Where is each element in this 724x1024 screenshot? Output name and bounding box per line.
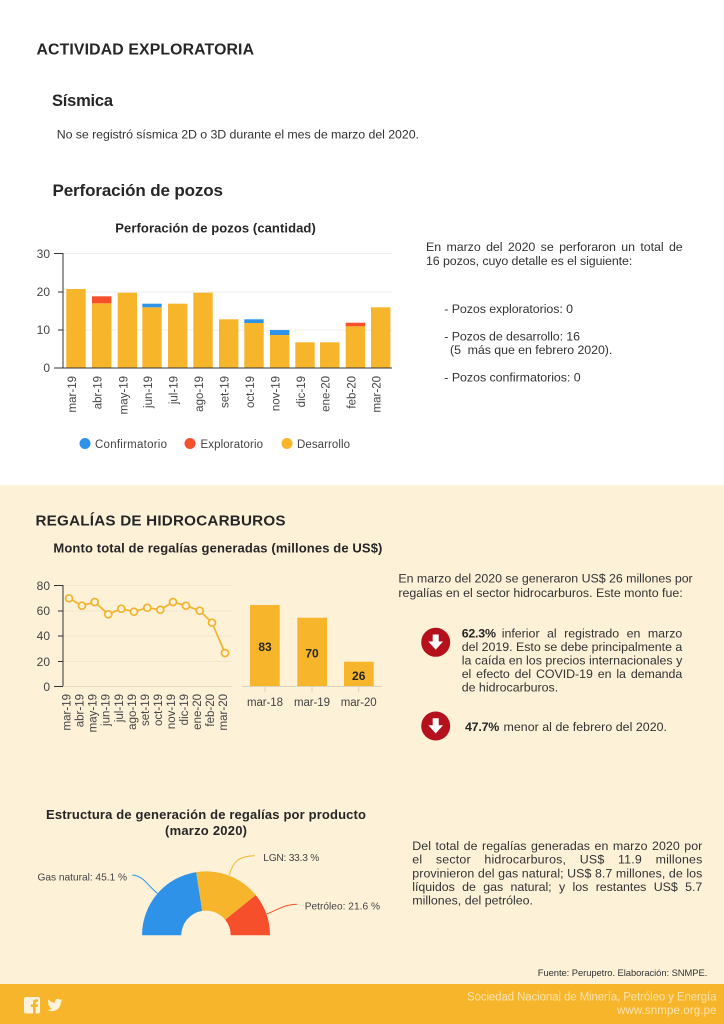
callout: 62.3%: de hidrocarburos. xyxy=(462,680,558,694)
bar chart: comparación anual: 70 xyxy=(305,646,319,660)
stacked bar chart: oct-19 xyxy=(245,376,257,408)
chart title: monto total: Monto total de regalías generadas (millones de US$) xyxy=(53,540,382,556)
text block: total de regalías: provinieron del gas natural; US$ 8.7 millones, de los xyxy=(412,866,702,880)
footer band xyxy=(0,984,724,1024)
stacked bar chart: set-19 xyxy=(220,376,232,408)
donut chart: estructura de regalías: Petróleo: 21.6 % xyxy=(305,902,380,912)
line chart: regalías mensuales: ago-19 xyxy=(127,694,139,730)
line chart: regalías mensuales: mar-20 xyxy=(218,694,230,730)
bar chart: comparación anual xyxy=(242,605,382,709)
bar chart: comparación anual: mar-19 xyxy=(294,697,330,709)
stacked bar chart: abr-19 xyxy=(93,376,105,409)
line chart: regalías mensuales: abr-19 xyxy=(74,694,86,727)
stacked bar chart: may-19 xyxy=(118,376,130,414)
panel: regalías background xyxy=(0,485,724,984)
line chart: regalías mensuales: 40 xyxy=(37,629,50,643)
panel: perforación chart xyxy=(37,220,392,451)
chart legend xyxy=(80,438,350,451)
text block: perforación summary: 16 pozos, cuyo detalle es el siguiente: xyxy=(426,254,632,268)
stacked bar chart: dic-19 xyxy=(296,376,308,407)
stacked bar chart: 20 xyxy=(37,285,50,299)
footer text: www.snmpe.org.pe xyxy=(616,1005,716,1017)
callout: 47.7%: 47.7% xyxy=(465,720,499,734)
line chart: regalías mensuales: oct-19 xyxy=(153,694,165,726)
line chart: regalías mensuales: 0 xyxy=(43,680,50,694)
text block: total de regalías: el sector hidrocarburos, US$ 11.9 millones xyxy=(412,852,702,866)
callout: 62.3%: del 2019. Esto se debe principalmente a xyxy=(462,640,682,654)
heading: actividad exploratoria: ACTIVIDAD EXPLORATORIA xyxy=(36,41,254,58)
chart legend: Desarrollo xyxy=(297,439,350,451)
line chart: regalías mensuales: feb-20 xyxy=(205,694,217,727)
donut chart: estructura de regalías: LGN: 33.3 % xyxy=(263,853,319,864)
chart legend: Confirmatorio xyxy=(95,439,167,451)
line chart: regalías mensuales xyxy=(37,579,232,732)
line chart: regalías mensuales: nov-19 xyxy=(166,694,178,729)
line chart: regalías mensuales: 20 xyxy=(37,655,50,669)
text block: regalías intro: regalías en el sector hidrocarburos. Este monto fue: xyxy=(398,586,683,600)
text block: perforación summary: - Pozos confirmatorios: 0 xyxy=(444,370,581,384)
donut chart: estructura de regalías: Gas natural: 45.1 % xyxy=(38,872,127,884)
text: sísmica note: No se registró sísmica 2D o 3D durante el mes de marzo del 2020. xyxy=(57,128,419,142)
stacked bar chart: 10 xyxy=(37,323,50,337)
text block: perforación summary: En marzo del 2020 se perforaron un total de xyxy=(426,240,683,254)
chart legend: Exploratorio xyxy=(200,439,263,451)
text block: perforación summary: (5 más que en febrero 2020). xyxy=(450,343,612,357)
text block: perforación summary xyxy=(426,240,683,384)
icon: down arrow 2 xyxy=(421,712,450,740)
stacked bar chart: 30 xyxy=(37,247,50,261)
text block: total de regalías xyxy=(412,839,702,908)
line chart: regalías mensuales: dic-19 xyxy=(179,694,191,725)
donut chart: estructura de regalías xyxy=(38,853,380,935)
callout: 62.3%: el efecto del COVID-19 en la demanda xyxy=(462,667,682,681)
stacked bar chart: feb-20 xyxy=(346,376,358,409)
bar chart: comparación anual: 83 xyxy=(258,640,272,654)
callout: 62.3%: la caída en los precios internacionales y xyxy=(462,654,683,668)
stacked bar chart: 0 xyxy=(43,361,50,375)
source note: Fuente: Perupetro. Elaboración: SNMPE. xyxy=(538,967,707,978)
footer text xyxy=(467,992,717,1017)
text block: total de regalías: líquidos de gas natural; y los restantes US$ 5.7 xyxy=(412,880,702,894)
icon: twitter xyxy=(47,999,63,1011)
callout: 47.7%: menor al de febrero del 2020. xyxy=(504,720,667,734)
heading: regalías de hidrocarburos: REGALÍAS DE HIDROCARBUROS xyxy=(36,512,286,530)
stacked bar chart: ago-19 xyxy=(194,376,206,412)
stacked bar chart: mar-19 xyxy=(67,376,79,412)
text block: regalías intro xyxy=(398,572,693,600)
line chart: regalías mensuales: 60 xyxy=(37,604,50,618)
text block: perforación summary: - Pozos exploratorios: 0 xyxy=(444,302,573,316)
text block: total de regalías: Del total de regalías generadas en marzo 2020 por xyxy=(412,839,702,853)
chart title: estructura xyxy=(46,807,366,838)
callout: 62.3%: 62.3% xyxy=(462,626,496,640)
bar chart: comparación anual: mar-18 xyxy=(247,697,283,709)
bar chart: comparación anual: 26 xyxy=(352,669,366,683)
stacked bar chart: nov-19 xyxy=(271,376,283,411)
callout: 62.3% xyxy=(462,626,683,694)
line chart: regalías mensuales: jun-19 xyxy=(101,694,113,727)
stacked bar chart: mar-20 xyxy=(372,376,384,412)
heading: sísmica: Sísmica xyxy=(52,92,114,110)
chart title: estructura: (marzo 2020) xyxy=(165,823,247,838)
line chart: regalías mensuales: mar-19 xyxy=(62,694,74,730)
callout: 62.3%: inferior al registrado en marzo xyxy=(502,626,682,640)
text block: total de regalías: millones, del petróleo. xyxy=(412,894,533,908)
text block: perforación summary: - Pozos de desarrollo: 16 xyxy=(444,329,580,343)
line chart: regalías mensuales: jul-19 xyxy=(114,694,126,723)
line chart: regalías mensuales: 80 xyxy=(37,579,50,593)
line chart: regalías mensuales: may-19 xyxy=(88,694,100,732)
chart title: Perforación de pozos (cantidad) xyxy=(115,220,316,236)
stacked bar chart xyxy=(37,247,392,414)
chart title: estructura: Estructura de generación de regalías por producto xyxy=(46,807,366,822)
stacked bar chart: ene-20 xyxy=(321,376,333,412)
heading: perforación de pozos: Perforación de pozos xyxy=(52,181,223,200)
icon: down arrow 1 xyxy=(421,628,450,657)
icon: facebook xyxy=(24,997,40,1014)
line chart: regalías mensuales: set-19 xyxy=(140,694,152,726)
bar chart: comparación anual: mar-20 xyxy=(341,697,377,709)
stacked bar chart: jul-19 xyxy=(169,376,181,405)
text block: regalías intro: En marzo del 2020 se generaron US$ 26 millones por xyxy=(398,572,693,586)
stacked bar chart: jun-19 xyxy=(143,376,155,409)
footer text: Sociedad Nacional de Minería, Petróleo y Energía xyxy=(467,992,717,1004)
line chart: regalías mensuales: ene-20 xyxy=(192,694,204,730)
